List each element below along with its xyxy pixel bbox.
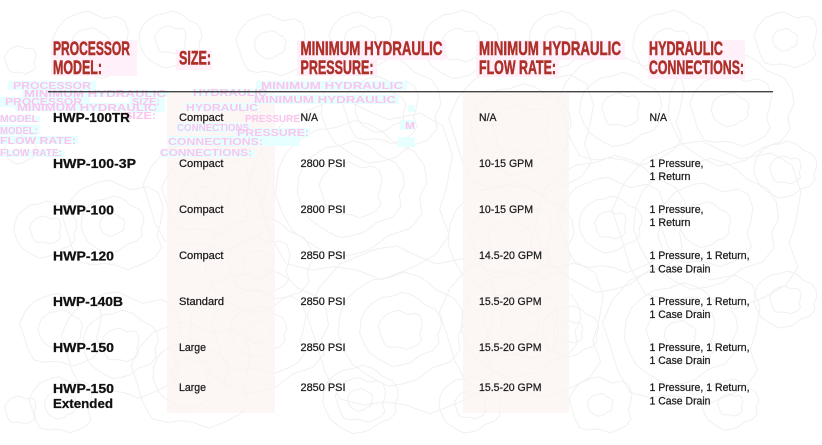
row: HWP-150: 2850 PSI bbox=[300, 342, 346, 354]
panel: flow rate column tint bbox=[463, 93, 569, 413]
row: HWP-150 bbox=[53, 340, 750, 367]
row: HWP-150 Extended: 15.5-20 GPM bbox=[479, 382, 542, 394]
row: HWP-100TR: Compact bbox=[179, 112, 224, 124]
row: HWP-140B: Standard bbox=[179, 296, 224, 308]
row: HWP-100-3P bbox=[53, 156, 704, 183]
ghosted heading artifacts: HYDRAULIC bbox=[186, 103, 258, 114]
row: HWP-150: 1 Pressure, 1 Return, bbox=[650, 342, 750, 354]
heading: processor model bbox=[51, 39, 137, 79]
row: HWP-140B: 2850 PSI bbox=[300, 296, 346, 308]
ghosted heading artifacts bbox=[0, 81, 415, 159]
ghosted heading artifacts: HYDRAULIC bbox=[193, 88, 267, 99]
heading: hydraulic connections: CONNECTIONS: bbox=[649, 58, 744, 79]
ghosted heading artifacts: CONNECTIONS: bbox=[168, 137, 263, 148]
heading: minimum hydraulic pressure bbox=[297, 39, 446, 79]
ghosted heading artifacts: PRESSURE bbox=[245, 114, 300, 125]
row: HWP-150 Extended: 1 Case Drain bbox=[650, 396, 710, 408]
panel: size column tint bbox=[167, 93, 275, 413]
row: HWP-140B: 1 Case Drain bbox=[650, 309, 710, 321]
row: HWP-120: HWP-120 bbox=[53, 248, 114, 264]
ghosted heading artifacts: M bbox=[405, 121, 415, 132]
ghosted heading artifacts: MINIMUM HYDRAULIC bbox=[17, 103, 157, 114]
row: HWP-120: 14.5-20 GPM bbox=[479, 250, 542, 262]
row: HWP-140B: HWP-140B bbox=[53, 294, 123, 309]
ghosted heading artifacts: PRESSURE: bbox=[237, 128, 309, 139]
row: HWP-100TR: N/A bbox=[650, 112, 668, 124]
row: HWP-100TR bbox=[53, 110, 668, 125]
ghosted heading artifacts: MINIMUM HYDRAULIC bbox=[261, 81, 403, 92]
ghosted heading artifacts: SIZE: bbox=[124, 111, 156, 122]
heading: hydraulic connections: HYDRAULIC bbox=[649, 39, 723, 60]
ghosted heading artifacts: PROCESSOR bbox=[13, 81, 92, 92]
row: HWP-100-3P: 10-15 GPM bbox=[479, 158, 533, 170]
row: HWP-100-3P: Compact bbox=[179, 158, 224, 170]
row: HWP-150: 1 Case Drain bbox=[650, 355, 710, 367]
heading: processor model: PROCESSOR bbox=[53, 39, 130, 60]
row: HWP-120: Compact bbox=[179, 250, 224, 262]
row: HWP-100: 1 Return bbox=[650, 217, 690, 229]
heading: minimum hydraulic pressure: PRESSURE: bbox=[300, 58, 374, 79]
row: HWP-150 Extended: Extended bbox=[53, 396, 113, 411]
row: HWP-120: 2850 PSI bbox=[300, 250, 346, 262]
row: HWP-140B: 1 Pressure, 1 Return, bbox=[650, 296, 750, 308]
heading: minimum hydraulic pressure: MINIMUM HYDRAULIC bbox=[300, 39, 443, 60]
heading: minimum hydraulic flow rate: MINIMUM HYDRAULIC bbox=[479, 39, 621, 60]
heading: processor model: MODEL: bbox=[53, 58, 102, 79]
row: HWP-120 bbox=[53, 248, 750, 276]
row: HWP-150: HWP-150 bbox=[53, 340, 114, 355]
ghosted heading artifacts: PROCESSOR bbox=[5, 97, 83, 108]
heading: minimum hydraulic flow rate bbox=[476, 39, 625, 79]
ghosted heading artifacts: SIZE: bbox=[132, 97, 160, 108]
row: HWP-100: 10-15 GPM bbox=[479, 204, 533, 216]
row: HWP-150 Extended: 2850 PSI bbox=[300, 382, 346, 394]
row: HWP-100-3P: 1 Return bbox=[650, 171, 690, 183]
row: HWP-100-3P: HWP-100-3P bbox=[53, 156, 136, 171]
row: HWP-150 Extended: Large bbox=[179, 382, 206, 394]
ghosted heading artifacts: MODEL: bbox=[0, 126, 38, 137]
row: HWP-100TR: N/A bbox=[479, 112, 497, 124]
ghosted heading artifacts: MINIMUM HYDRAULIC bbox=[254, 95, 396, 106]
row: HWP-100: Compact bbox=[179, 204, 224, 216]
row: HWP-100-3P: 2800 PSI bbox=[300, 158, 346, 170]
row: HWP-120: 1 Case Drain bbox=[650, 264, 710, 276]
row: HWP-120: 1 Pressure, 1 Return, bbox=[650, 250, 750, 262]
ghosted heading artifacts: FLOW RATE: bbox=[0, 136, 76, 147]
row: HWP-150: 15.5-20 GPM bbox=[479, 342, 542, 354]
row: HWP-100: HWP-100 bbox=[53, 202, 114, 218]
heading: size: SIZE: bbox=[179, 48, 211, 70]
row: HWP-150 Extended: HWP-150 bbox=[53, 381, 114, 396]
ghosted heading artifacts: CONNECTIONS: bbox=[160, 148, 252, 159]
ghosted heading artifacts: FLOW RATE: bbox=[0, 148, 62, 159]
row: HWP-100: 1 Pressure, bbox=[650, 204, 704, 216]
row: HWP-150: Large bbox=[179, 342, 206, 354]
row: HWP-100 bbox=[53, 202, 704, 229]
ghosted heading artifacts: MINIMUM HYDRAULIC bbox=[24, 89, 166, 100]
heading: minimum hydraulic flow rate: FLOW RATE: bbox=[479, 58, 556, 79]
row: HWP-100TR: HWP-100TR bbox=[53, 110, 131, 125]
row: HWP-140B bbox=[53, 294, 750, 321]
ghosted heading artifacts: MODEL bbox=[0, 114, 38, 125]
row: HWP-100TR: N/A bbox=[300, 112, 319, 124]
row: HWP-150 Extended bbox=[53, 381, 750, 411]
row: HWP-150 Extended: 1 Pressure, 1 Return, bbox=[650, 382, 750, 394]
heading: size bbox=[176, 48, 212, 70]
row: HWP-100: 2800 PSI bbox=[300, 204, 346, 216]
row: HWP-100-3P: 1 Pressure, bbox=[650, 158, 704, 170]
ghosted heading artifacts: CONNECTIONS bbox=[177, 123, 249, 134]
row: HWP-140B: 15.5-20 GPM bbox=[479, 296, 542, 308]
heading: hydraulic connections bbox=[648, 39, 745, 79]
